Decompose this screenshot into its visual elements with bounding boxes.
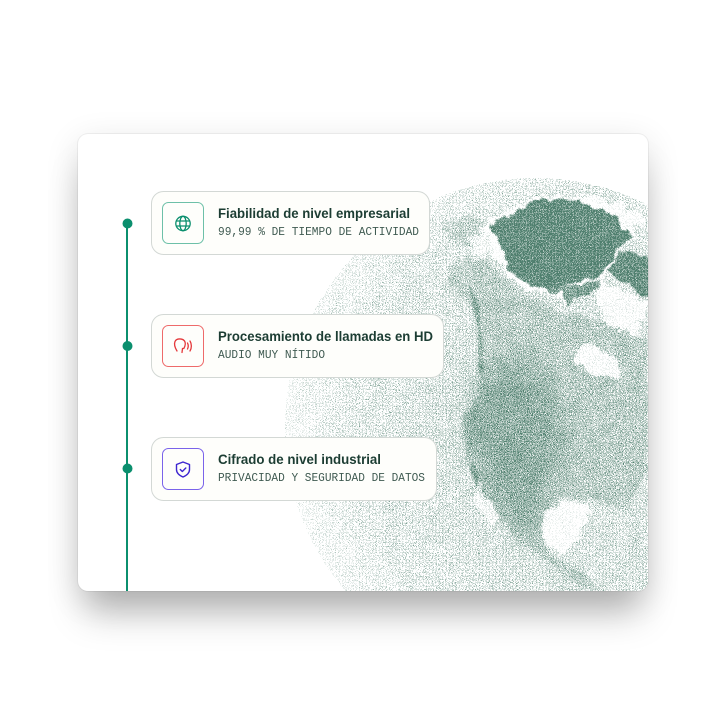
greenland strait dark sea — [607, 250, 648, 297]
card subtitle: 99,99 % DE TIEMPO DE ACTIVIDAD — [218, 225, 419, 239]
icon box: globe — [162, 202, 204, 244]
archipelago channels — [545, 282, 600, 306]
card subtitle: PRIVACIDAD Y SEGURIDAD DE DATOS — [218, 471, 425, 485]
land: north america — [446, 255, 648, 590]
timeline line — [126, 223, 128, 591]
globe map — [285, 178, 648, 591]
infographic artwork — [122, 178, 648, 591]
land: interior darker band — [468, 355, 565, 540]
globe ocean — [285, 178, 648, 591]
card title: Cifrado de nivel industrial — [218, 452, 381, 467]
timeline dot 2 — [122, 341, 132, 351]
feature card: HD calls — [152, 314, 444, 378]
card subtitle: AUDIO MUY NÍTIDO — [218, 347, 325, 362]
feature card: encryption — [152, 438, 436, 500]
icon box: speaking head — [162, 326, 204, 366]
timeline dot 1 — [122, 218, 132, 228]
timeline dot 3 — [122, 464, 132, 474]
card title: Fiabilidad de nivel empresarial — [218, 206, 410, 221]
icon box: shield — [162, 448, 204, 490]
land: asia fragment — [442, 214, 484, 246]
arctic dark sea — [492, 198, 633, 288]
feature card: reliability — [152, 192, 430, 254]
panel: card background — [78, 134, 648, 591]
card title: Procesamiento de llamadas en HD — [218, 329, 433, 344]
